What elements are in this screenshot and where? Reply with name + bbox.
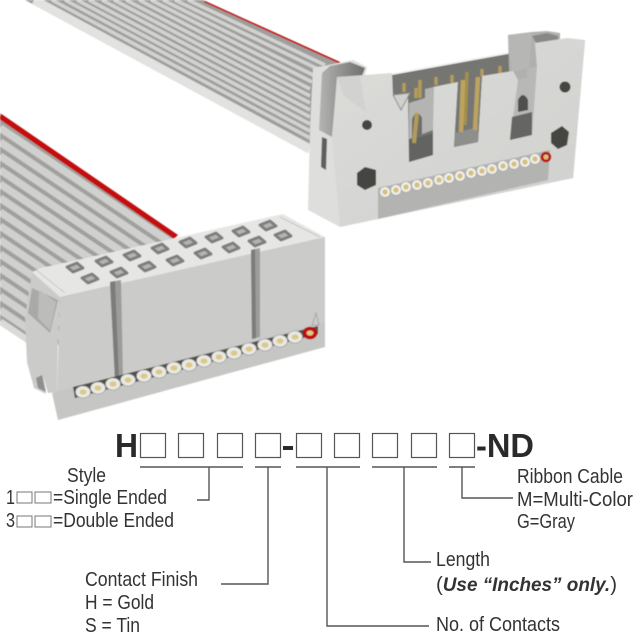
label: length: (Use “Inches” only.)	[436, 573, 617, 596]
label: style: Style	[67, 464, 106, 487]
part number code	[115, 427, 534, 464]
socket connector (bottom left)	[25, 214, 325, 420]
part number suffix -ND: -ND	[476, 427, 534, 464]
label: length	[436, 548, 617, 596]
socket top face	[32, 214, 325, 297]
socket pin band	[73, 326, 318, 398]
connector right top block	[508, 31, 585, 190]
label: contact finish: Contact Finish	[85, 568, 198, 591]
socket contact pins	[76, 327, 317, 398]
label: style: 3	[6, 509, 15, 532]
label: contact finish: H = Gold	[85, 591, 154, 614]
label: style: =Double Ended	[53, 509, 174, 532]
label: number of contacts: No. of Contacts	[436, 613, 560, 636]
connector front face	[332, 38, 585, 227]
label: style	[6, 464, 174, 532]
label: ribbon cable: G=Gray	[517, 510, 576, 533]
socket left end	[25, 272, 60, 394]
label: style: =Single Ended	[53, 486, 167, 509]
opening 2 with gold pins	[454, 72, 482, 147]
opening 3	[510, 95, 532, 140]
socket polarity triangle	[312, 313, 319, 325]
socket slots	[110, 248, 260, 380]
socket front face	[57, 237, 325, 392]
label: contact finish	[85, 568, 198, 637]
opening 1 with pin	[409, 87, 434, 162]
pin strip	[378, 150, 550, 219]
label: length: Length	[436, 548, 490, 571]
header contact pins	[380, 152, 551, 197]
connector back wall	[392, 53, 540, 170]
mounting holes	[357, 82, 570, 190]
leader lines	[140, 467, 513, 626]
part number boxes	[140, 434, 474, 458]
header connector (top right)	[308, 31, 585, 227]
lower ribbon cable	[0, 112, 178, 346]
connector left side	[308, 60, 367, 227]
label: style: 1	[6, 486, 15, 509]
socket lower lip	[52, 322, 325, 420]
dash	[283, 446, 293, 450]
upper ribbon cable	[25, 0, 342, 153]
label: contact finish: S = Tin	[85, 614, 140, 637]
back pins	[404, 66, 500, 98]
socket square holes	[67, 221, 291, 283]
polarity triangle	[393, 93, 410, 110]
label: ribbon cable	[517, 465, 633, 533]
label: ribbon cable: Ribbon Cable	[517, 465, 623, 488]
part number prefix H: H	[115, 427, 138, 464]
